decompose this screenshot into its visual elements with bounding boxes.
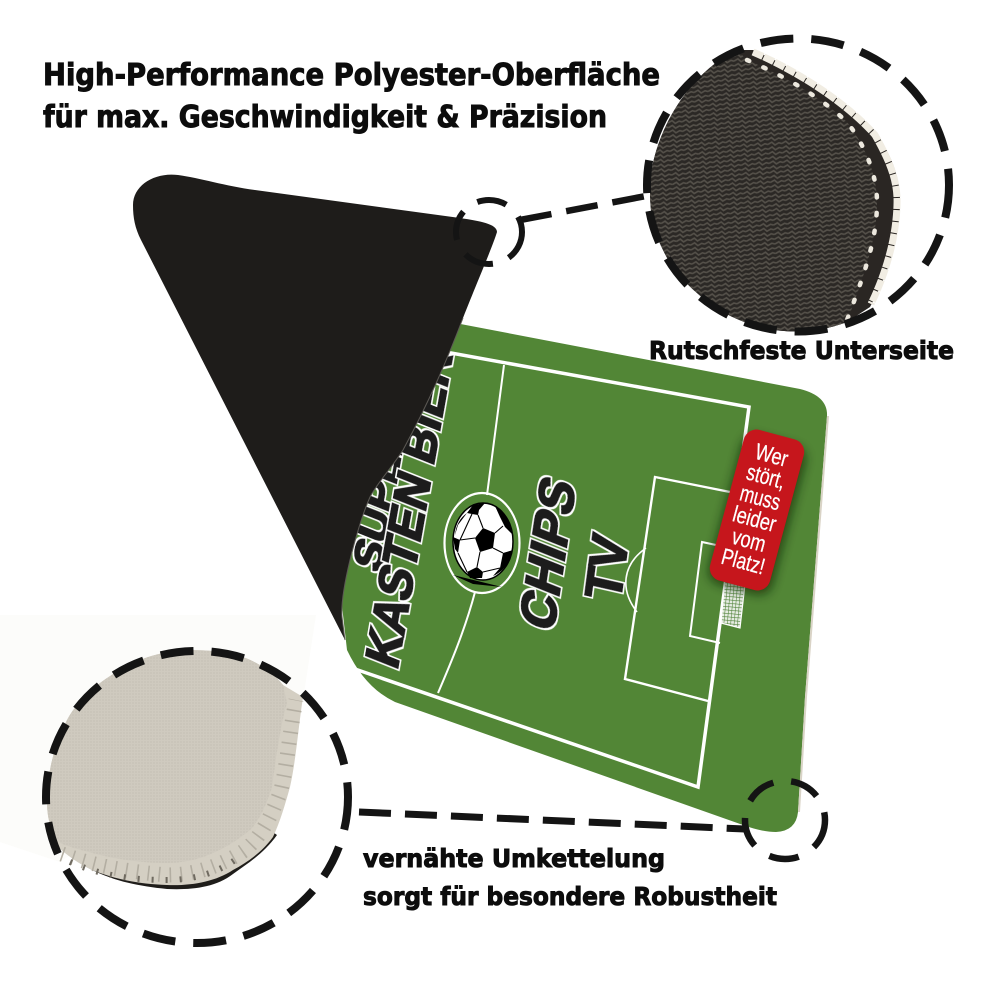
fabric dark band: [650, 50, 900, 332]
red tag: Wer stört, muss leider vom Platz!: leider: [730, 500, 780, 537]
label: stitched edge: sorgt für besondere Robustheit: [363, 882, 777, 911]
connector line: flap corner to close-up: [520, 196, 646, 220]
label: stitched edge: vernähte Umkettelung: [363, 844, 665, 873]
label: anti-slip underside: Rutschfeste Unterseite: [649, 336, 954, 365]
dashed circle: flap corner: [456, 200, 522, 264]
red tag: Wer stört, muss leider vom Platz!: Platz!: [719, 543, 768, 579]
loop shadows: [70, 860, 235, 880]
heading: für max. Geschwindigkeit & Präzision: [43, 100, 607, 135]
dashed circle: anti-slip close-up: [647, 38, 949, 332]
panel: black folded underside flap: [133, 175, 497, 640]
shadow under edge: [60, 830, 277, 889]
red tag: Wer stört, muss leider vom Platz!: Wer: [752, 438, 791, 472]
pitch lines: [352, 351, 749, 787]
heading: [43, 58, 660, 135]
flap edge stitching: [342, 318, 463, 640]
goal net: [721, 578, 745, 628]
woven texture: [650, 50, 877, 332]
mat edge sliver: [798, 416, 829, 812]
dashed circle: mat corner: [745, 781, 825, 859]
red tag: Wer stört, muss leider vom Platz!: [707, 427, 807, 593]
pitch text: SUPER: SUPER: [345, 412, 414, 577]
mesh surface: [47, 650, 287, 863]
green mat: [330, 322, 827, 832]
detail: stitched edge close-up: [47, 650, 303, 889]
red tag: Wer stört, muss leider vom Platz!: stört,: [744, 459, 788, 494]
tag shadow: [705, 432, 809, 598]
stitched loops: [62, 700, 296, 875]
red tag: Wer stört, muss leider vom Platz!: muss: [737, 480, 784, 515]
connector line: mat corner to close-up: [359, 812, 745, 829]
panel: faint white mat backdrop: [0, 615, 316, 862]
red tag: Wer stört, muss leider vom Platz!: vom: [729, 523, 769, 557]
heading: High-Performance Polyester-Oberfläche: [43, 58, 660, 93]
dashed circle: stitched edge close-up: [46, 651, 348, 943]
stitching dots: [747, 60, 877, 320]
fabric base: [47, 650, 303, 885]
panel: green mat surface with pitch: [330, 322, 829, 832]
pitch text: KASTEN BIER: KASTEN BIER: [357, 340, 463, 675]
detail: anti-slip underside close-up: [650, 50, 900, 332]
pitch text: CHIPS: CHIPS: [510, 469, 587, 638]
football icon: [453, 503, 513, 587]
pitch text: TV: TV: [574, 529, 639, 605]
white rim: [753, 52, 897, 304]
label: stitched edge: [363, 844, 777, 911]
